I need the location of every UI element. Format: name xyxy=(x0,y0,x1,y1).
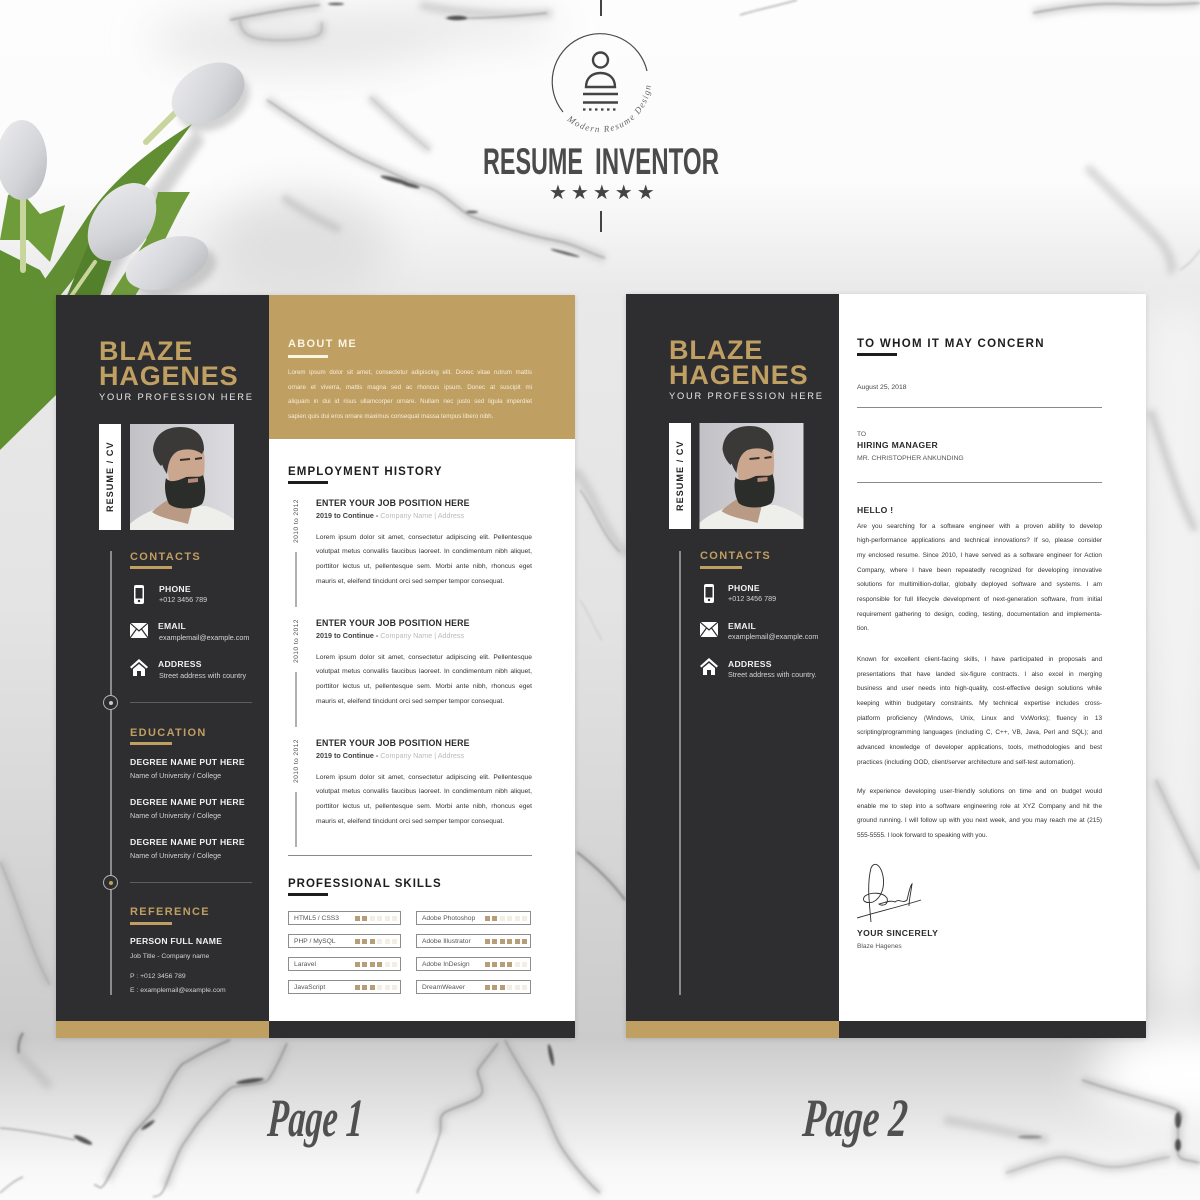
job 1: porttitor lectus ut, pellentesque sem. Morbi ante nibh, rhoncus eget xyxy=(316,563,532,570)
job 1 xyxy=(293,498,532,607)
letter paragraph 3: ground running. I will follow up with you next week, and you may reach me at (215) xyxy=(857,817,1102,824)
candidate name xyxy=(669,335,808,390)
candidate name: BLAZE xyxy=(669,335,763,365)
resume cv tab xyxy=(99,424,121,530)
letter paragraph 1: Company, where I have been repeatedly recognized for developing innovative xyxy=(857,567,1102,574)
candidate name: HAGENES xyxy=(99,361,238,391)
skill: InDesign: Adobe InDesign xyxy=(422,961,470,968)
skill: PHP: PHP / MySQL xyxy=(294,938,336,945)
letter paragraph 2: business and user needs into high-quality, cost-effective design solutions while xyxy=(857,685,1102,692)
skill: JavaScript: JavaScript xyxy=(294,984,325,991)
profession: YOUR PROFESSION HERE xyxy=(99,392,254,402)
letter paragraph 3: 555-5555. I look forward to speaking with you. xyxy=(857,832,987,839)
contact: phone xyxy=(704,583,776,603)
contact: email: examplemail@example.com xyxy=(159,632,249,642)
resume cv tab: RESUME / CV xyxy=(675,441,685,511)
letter paragraph 2: presentations that have landed six-figure contracts. I also excel in merging xyxy=(857,671,1102,678)
job 2: mauris et, eleifend tincidunt orci sed semper tempor consequat. xyxy=(316,698,504,705)
page 1 label: Page 1 xyxy=(266,1088,365,1148)
logo caption: Modern Resume Design xyxy=(566,86,652,132)
job 1: 2010 to 2012 xyxy=(293,499,300,543)
tulip stems xyxy=(23,113,175,295)
letter paragraph 1 xyxy=(857,522,1102,632)
tulip bouquet xyxy=(0,62,252,450)
recipient block xyxy=(857,431,964,462)
job 1: volutpat metus convallis faucibus laoreet. In condimentum nibh aliquet, xyxy=(316,548,532,555)
letter paragraph 3: enable me to step into a software engineering role at XYZ Company and hit the xyxy=(857,803,1102,810)
job 3: 2019 to Continue - Company Name | Address xyxy=(316,751,464,760)
icon: envelope xyxy=(130,623,148,638)
skill: Laravel: Laravel xyxy=(294,961,316,968)
brand name xyxy=(483,141,719,180)
reference heading: REFERENCE xyxy=(130,906,210,918)
about me text: ornare et viverra, mattis magna sed ac rhoncus ipsum. Donec at suscipit mi xyxy=(288,384,532,391)
education heading: EDUCATION xyxy=(130,726,207,738)
skill: HTML5 xyxy=(288,911,401,925)
five star rating: ★★★★★ xyxy=(549,180,659,204)
reference details: P : +012 3456 789 xyxy=(130,972,186,980)
skills heading: PROFESSIONAL SKILLS xyxy=(288,878,442,890)
contact: phone: PHONE xyxy=(728,583,760,593)
letter heading: TO WHOM IT MAY CONCERN xyxy=(857,338,1045,350)
skill: DreamWeaver: DreamWeaver xyxy=(422,984,465,991)
recipient block: HIRING MANAGER xyxy=(857,440,938,450)
timeline node xyxy=(103,875,118,890)
job 2: ENTER YOUR JOB POSITION HERE xyxy=(316,618,470,628)
contact: email: EMAIL xyxy=(158,621,186,631)
footer bar page 1 xyxy=(56,1021,575,1038)
candidate name xyxy=(99,336,238,391)
recipient block: TO xyxy=(857,431,866,438)
job 3: volutpat metus convallis faucibus laoreet. In condimentum nibh aliquet, xyxy=(316,788,532,795)
job 2: volutpat metus convallis faucibus laoreet. In condimentum nibh aliquet, xyxy=(316,668,532,675)
resume page 2 xyxy=(626,294,1146,1038)
skill: HTML5: HTML5 / CSS3 xyxy=(294,915,339,922)
reference details: E : examplemail@example.com xyxy=(130,986,226,994)
contact: phone: PHONE xyxy=(159,584,191,594)
closing: Blaze Hagenes xyxy=(857,943,902,950)
about me heading: ABOUT ME xyxy=(288,338,357,350)
professional skills xyxy=(288,878,531,994)
about me text: aliquam in dui id risus ullamcorper ornare. Nullam nec justo sed ligula imperdiet xyxy=(288,398,532,405)
skill: InDesign xyxy=(416,957,531,971)
job 1: mauris et, eleifend tincidunt orci sed semper tempor consequat. xyxy=(316,578,504,585)
letter paragraph 1: requirement gathering to design, coding, testing, documentation and implementa- xyxy=(857,611,1102,618)
contact: phone: +012 3456 789 xyxy=(159,595,207,604)
skill: Laravel xyxy=(288,957,401,971)
about me text: Lorem ipsum dolor sit amet, consectetur adipiscing elit. Donec vitae rutrum mattis xyxy=(288,369,532,376)
sidebar page 1 xyxy=(56,295,269,1021)
job 3: mauris et, eleifend tincidunt orci sed semper tempor consequat. xyxy=(316,818,504,825)
signature xyxy=(857,864,922,922)
job 1: Lorem ipsum dolor sit amet, consectetur adipiscing elit. Pellentesque xyxy=(316,534,532,540)
letter paragraph 1: tion. xyxy=(857,625,869,632)
contact: email xyxy=(130,621,249,642)
letter date: August 25, 2018 xyxy=(857,384,907,390)
job 2: 2019 to Continue - Company Name | Address xyxy=(316,631,464,640)
icon: envelope xyxy=(700,622,718,637)
letter paragraph 1: Are you searching for a software engineer with a proven ability to develop xyxy=(857,522,1102,530)
icon: phone xyxy=(134,585,144,604)
letter paragraph 3 xyxy=(857,788,1102,839)
letter paragraph 1: my enclosed resume. Since 2010, I have served as a software engineer for Action xyxy=(857,552,1102,559)
portrait photo xyxy=(130,424,234,530)
letter paragraph 2: keeping within budgetary constraints. My technical expertise includes cross- xyxy=(857,700,1102,707)
page 2 label: Page 2 xyxy=(801,1088,910,1148)
about me text: sapien quis dui eros ornare maximus consequat massa tempus libero nibh. xyxy=(288,413,493,420)
letter paragraph 2 xyxy=(857,656,1102,766)
skill: Photoshop xyxy=(416,911,531,925)
letter paragraph 1: high-performance applications and technical innovations? If so, please consider xyxy=(857,537,1102,544)
letter paragraph 1: responsible for full lifecycle development of next-generation software, from initial xyxy=(857,596,1102,603)
contact: email: examplemail@example.com xyxy=(728,632,818,641)
job 3: Lorem ipsum dolor sit amet, consectetur adipiscing elit. Pellentesque xyxy=(316,774,532,780)
timeline line xyxy=(110,551,112,995)
timeline node xyxy=(103,695,118,710)
job 2: Lorem ipsum dolor sit amet, consectetur adipiscing elit. Pellentesque xyxy=(316,654,532,660)
reference details xyxy=(130,936,226,994)
job 3: porttitor lectus ut, pellentesque sem. Morbi ante nibh, rhoncus eget xyxy=(316,803,532,810)
contact: address: ADDRESS xyxy=(158,659,202,669)
about me panel xyxy=(269,295,575,439)
contact: address: Street address with country. xyxy=(728,670,817,679)
skill: PHP xyxy=(288,934,401,948)
letter paragraph 2: practices (including OOD, client/server architecture and self-test automation). xyxy=(857,759,1075,766)
contact: email xyxy=(700,621,818,641)
employment history xyxy=(288,466,532,847)
contact: phone: +012 3456 789 xyxy=(728,594,776,603)
employment heading: EMPLOYMENT HISTORY xyxy=(288,466,443,478)
footer bar page 2 xyxy=(626,1021,1146,1038)
reference details: Job Title - Company name xyxy=(130,952,209,960)
contacts heading: CONTACTS xyxy=(700,550,771,562)
letter paragraph 2: platform proficiency (Windows, Unix, Linux and VxWorks); fluency in 13 xyxy=(857,715,1102,722)
icon: phone xyxy=(704,584,714,603)
closing xyxy=(857,928,938,950)
job 3: 2010 to 2012 xyxy=(293,739,300,783)
letter paragraph 2: advanced knowledge of developer applications, tools, methodologies and best xyxy=(857,744,1102,751)
icon: house xyxy=(130,659,148,676)
lower divider tick xyxy=(600,211,602,232)
skill: Illustrator xyxy=(416,934,531,948)
logo ring xyxy=(552,34,647,112)
candidate name: BLAZE xyxy=(99,336,193,366)
job 2: porttitor lectus ut, pellentesque sem. Morbi ante nibh, rhoncus eget xyxy=(316,683,532,690)
letter paragraph 2: scripting/programming languages (including C, C++, VB, Java, Perl and SQL); and xyxy=(857,729,1102,736)
contact: address xyxy=(130,659,246,680)
job 3 xyxy=(293,738,532,847)
education list: Name of University / College xyxy=(130,770,221,780)
skill: Photoshop: Adobe Photoshop xyxy=(422,915,475,922)
candidate name: HAGENES xyxy=(669,360,808,390)
job 3: ENTER YOUR JOB POSITION HERE xyxy=(316,738,470,748)
soft shadow under tulips xyxy=(70,60,260,310)
brand logo xyxy=(552,33,652,132)
contact: address: Street address with country xyxy=(159,670,246,680)
contact: address: ADDRESS xyxy=(728,659,772,669)
education list: DEGREE NAME PUT HERE xyxy=(130,837,245,847)
person emblem xyxy=(583,52,618,110)
contact: phone xyxy=(134,584,207,604)
job 2 xyxy=(293,618,532,727)
contact: email: EMAIL xyxy=(728,621,756,631)
closing: YOUR SINCERELY xyxy=(857,928,938,938)
education list: DEGREE NAME PUT HERE xyxy=(130,797,245,807)
greeting: HELLO ! xyxy=(857,505,893,515)
education list: Name of University / College xyxy=(130,850,221,860)
resume cv tab xyxy=(669,423,691,529)
letter paragraph 3: My experience developing user-friendly solutions on time and on budget would xyxy=(857,788,1102,795)
resume cv tab: RESUME / CV xyxy=(105,442,115,512)
job 1: 2019 to Continue - Company Name | Address xyxy=(316,511,464,520)
education list xyxy=(130,757,245,860)
letter paragraph 2: Known for excellent client-facing skills, I have participated in proposals and xyxy=(857,656,1102,663)
contacts heading: CONTACTS xyxy=(130,551,201,563)
contact: address xyxy=(700,658,817,679)
skill: JavaScript xyxy=(288,980,401,994)
reference details: PERSON FULL NAME xyxy=(130,936,222,946)
education list: DEGREE NAME PUT HERE xyxy=(130,757,245,767)
skill: Illustrator: Adobe Illustrator xyxy=(422,938,471,945)
timeline line xyxy=(679,551,680,995)
about me text xyxy=(288,369,532,420)
tulip leaves xyxy=(0,124,192,450)
tulip flowers xyxy=(0,50,255,300)
icon: house xyxy=(700,658,718,675)
profession: YOUR PROFESSION HERE xyxy=(669,391,824,401)
letter paragraph 1: solutions for multimillion-dollar, globally deployed software and systems. I am xyxy=(857,581,1102,588)
recipient block: MR. CHRISTOPHER ANKUNDING xyxy=(857,454,964,462)
skill: DreamWeaver xyxy=(416,980,531,994)
portrait photo xyxy=(700,423,804,529)
resume page 1 xyxy=(56,295,575,1038)
sidebar page 2 xyxy=(626,294,839,1021)
job 1: ENTER YOUR JOB POSITION HERE xyxy=(316,498,470,508)
education list: Name of University / College xyxy=(130,810,221,820)
job 2: 2010 to 2012 xyxy=(293,619,300,663)
top divider tick xyxy=(600,0,602,16)
